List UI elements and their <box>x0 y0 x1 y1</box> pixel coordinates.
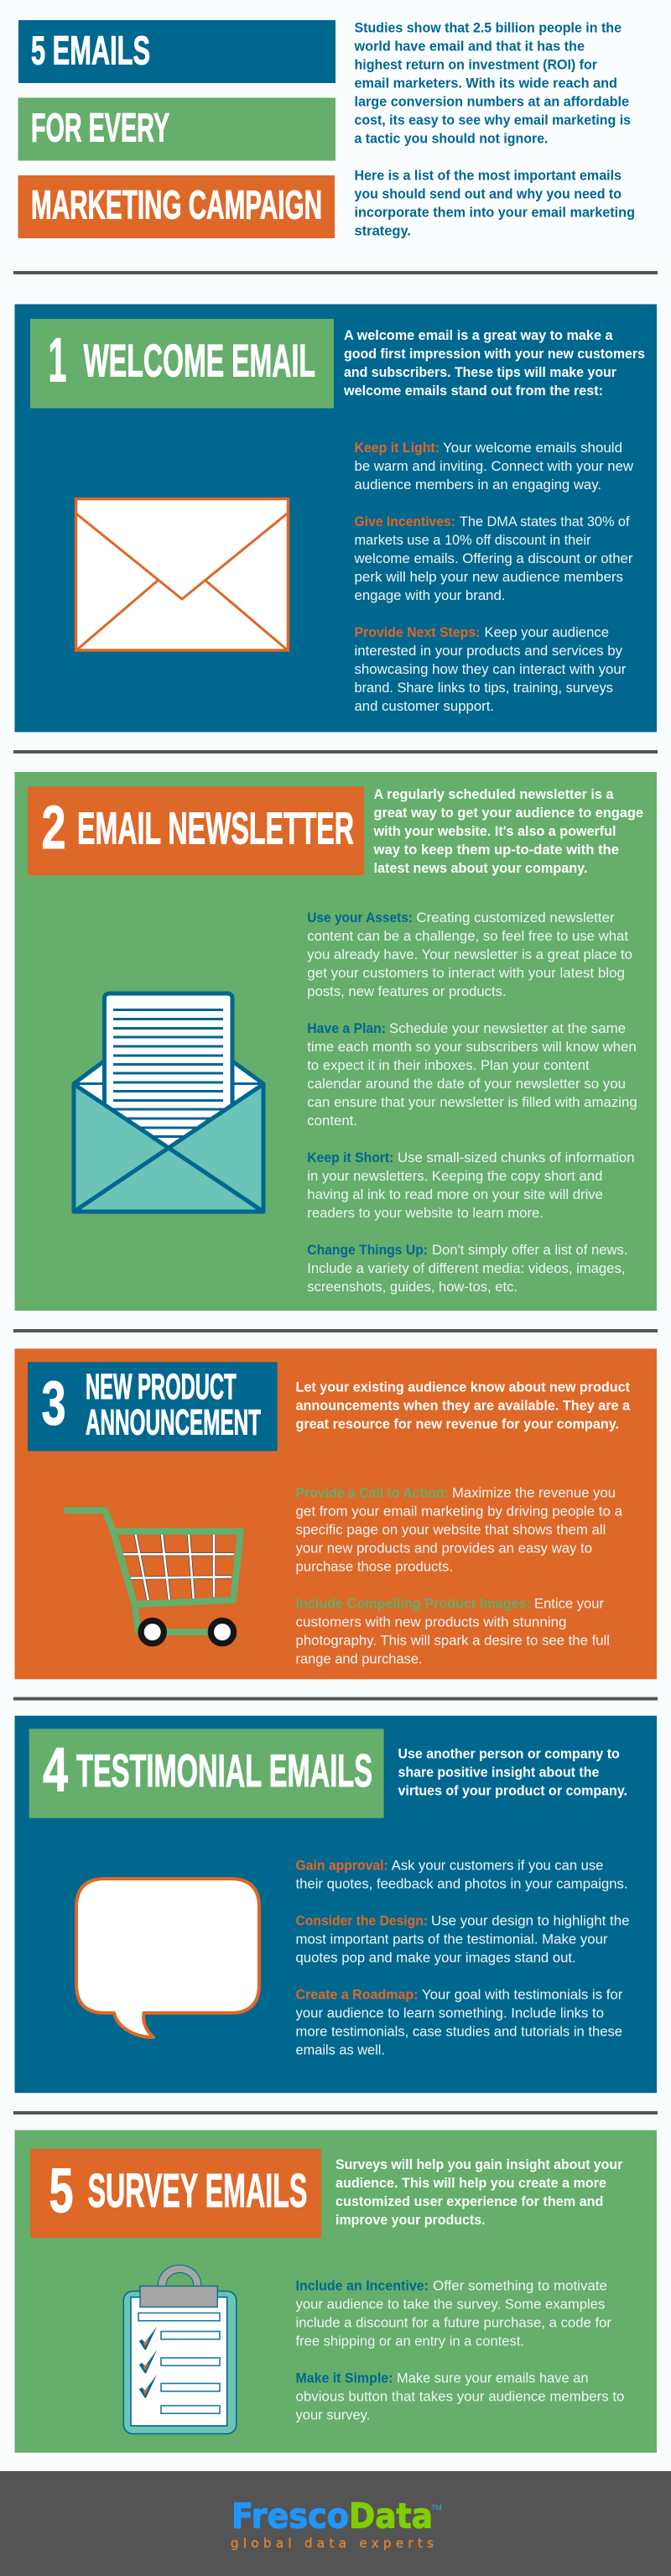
intro text: great resource for new revenue for your company. <box>295 1417 619 1432</box>
tip: have a plan: can ensure that your newsletter is filled with amazing <box>307 1094 637 1110</box>
intro text: virtues of your product or company. <box>398 1784 627 1799</box>
tip: include compelling product images <box>295 1596 610 1667</box>
tip: make it simple: your survey. <box>295 2407 370 2422</box>
heading: 5 survey emails <box>30 2149 321 2238</box>
tip: use your assets: Creating customized newsletter <box>416 910 615 926</box>
icon: envelope <box>75 498 289 650</box>
intro text: way to keep them up-to-date with the <box>372 842 619 858</box>
tip: include compelling product images: Include Compelling Product Images: <box>295 1596 531 1612</box>
tip: keep it short: in your newsletters. Keeping the copy short and <box>307 1168 602 1184</box>
intro text: share positive insight about the <box>398 1765 599 1781</box>
title bar: 5 emails <box>18 20 336 83</box>
intro text: customized user experience for them and <box>336 2194 603 2209</box>
tip: change things up <box>307 1242 627 1295</box>
tip: consider the design: most important parts of the testimonial. Make your <box>295 1932 608 1948</box>
intro paragraphs: world have email and that it has the <box>354 39 585 54</box>
tip: keep it short <box>307 1150 635 1221</box>
tip: provide a call to action: specific page on your website that shows them all <box>295 1522 606 1538</box>
intro text: Surveys will help you gain insight about your <box>336 2157 623 2172</box>
tip: provide next steps: Provide Next Steps: <box>354 624 480 640</box>
heading: 3 new product announcement: ANNOUNCEMENT <box>86 1403 261 1443</box>
tip: have a plan: time each month so your subscribers will know when <box>307 1039 637 1055</box>
tip: consider the design: Consider the Design: <box>295 1913 428 1929</box>
tip: use your assets: you already have. Your newsletter is a great place to <box>307 946 632 962</box>
intro text: Let your existing audience know about new product <box>295 1380 630 1395</box>
icon: shopping cart <box>67 1510 241 1646</box>
tip: provide a call to action: purchase those products. <box>295 1559 453 1575</box>
intro paragraphs: a tactic you should not ignore. <box>354 131 549 146</box>
icon: open envelope with newsletter <box>74 993 263 1212</box>
title bar: marketing campaign: MARKETING CAMPAIGN <box>31 183 322 228</box>
tip: have a plan: to expect it in their inboxes. Plan your content <box>307 1057 590 1073</box>
tip: keep it light: Keep it Light: <box>354 440 440 456</box>
intro text: great way to get your audience to engage <box>374 806 643 821</box>
heading: 2 email newsletter: 2 <box>42 794 65 862</box>
intro paragraphs: you should send out and why you need to <box>354 186 622 201</box>
tip: give incentives: Give Incentives: <box>354 514 455 529</box>
tip: use your assets: get your customers to interact with your latest blog <box>307 965 625 981</box>
title bar: for every <box>18 97 336 161</box>
logo: FrescoData: global data experts <box>231 2536 434 2551</box>
icon: speech bubble <box>76 1879 259 2037</box>
intro paragraphs: large conversion numbers at an affordable <box>354 94 629 109</box>
tip: keep it light: be warm and inviting. Connect with your new <box>354 458 634 474</box>
tip: include an incentive: include a discount for a future purchase, a code for <box>295 2314 611 2330</box>
tip: keep it light <box>354 440 634 493</box>
tip: change things up: Don't simply offer a list of news. <box>432 1242 627 1258</box>
tip: create a roadmap: emails as well. <box>295 2042 385 2058</box>
tip: have a plan: Have a Plan: <box>307 1020 386 1036</box>
intro text: Use another person or company to <box>398 1747 620 1762</box>
heading: 4 testimonial emails: 4 <box>43 1735 68 1804</box>
logo: FrescoData: Fresco <box>231 2495 349 2536</box>
footer <box>0 2471 671 2576</box>
tip: include an incentive: Include an Incentive: <box>295 2277 429 2293</box>
heading: 3 new product announcement: NEW PRODUCT <box>86 1367 237 1407</box>
title bar: marketing campaign <box>18 175 335 238</box>
tip: include compelling product images: range and purchase. <box>295 1651 423 1667</box>
tip: include an incentive: your audience to take the survey. Some examples <box>295 2296 605 2312</box>
tip: provide a call to action <box>295 1485 623 1575</box>
tip: provide a call to action: Maximize the revenue you <box>452 1485 616 1501</box>
tip: gain approval: their quotes, feedback and photos in your campaigns. <box>295 1876 627 1892</box>
panel: email newsletter <box>15 772 657 1311</box>
panel: welcome email <box>15 304 657 732</box>
tip: change things up: Change Things Up: <box>307 1242 428 1258</box>
tip: consider the design <box>295 1913 629 1966</box>
tip: keep it short: Use small-sized chunks of information <box>398 1150 635 1165</box>
intro text <box>372 787 643 876</box>
intro paragraphs: highest return on investment (ROI) for <box>354 57 598 72</box>
heading: 1 welcome email <box>30 319 334 408</box>
tip: gain approval: Gain approval: <box>295 1858 388 1874</box>
tip: change things up: screenshots, guides, how-tos, etc. <box>307 1279 518 1295</box>
intro paragraphs: email marketers. With its wide reach and <box>354 76 617 91</box>
tip: use your assets <box>307 910 632 999</box>
intro paragraphs: incorporate them into your email marketing <box>354 205 635 220</box>
tip: make it simple: obvious button that takes your audience members to <box>295 2388 624 2404</box>
tip: provide next steps: brand. Share links to tips, training, surveys <box>354 680 613 696</box>
title bar: 5 emails: 5 EMAILS <box>31 29 150 74</box>
panel: testimonial emails <box>15 1716 657 2093</box>
tip: provide next steps: interested in your products and services by <box>354 643 622 659</box>
tip: create a roadmap: your audience to learn something. Include links to <box>295 2005 604 2021</box>
intro text: welcome emails stand out from the rest: <box>343 383 603 399</box>
tip: consider the design: quotes pop and make your images stand out. <box>295 1950 576 1966</box>
heading: 5 survey emails: 5 <box>49 2155 74 2225</box>
heading: 3 new product announcement: 3 <box>42 1368 65 1438</box>
panel: new product announcement <box>15 1348 657 1679</box>
intro paragraphs <box>354 20 635 238</box>
tip: create a roadmap <box>295 1987 623 2058</box>
tip: create a roadmap: Create a Roadmap: <box>295 1987 418 2003</box>
tip: create a roadmap: more testimonials, case studies and tutorials in these <box>295 2024 622 2040</box>
tip: include compelling product images: photography. This will spark a desire to see the full <box>295 1633 610 1649</box>
tip: consider the design: Use your design to highlight the <box>431 1913 629 1929</box>
tip: give incentives: markets use a 10% off discount in their <box>354 532 591 548</box>
intro text: latest news about your company. <box>374 861 587 876</box>
heading: 2 email newsletter <box>28 787 364 875</box>
intro paragraphs: Here is a list of the most important emails <box>354 168 622 183</box>
tip: create a roadmap: Your goal with testimonials is for <box>422 1987 623 2003</box>
intro text <box>336 2157 623 2228</box>
intro text <box>398 1747 627 1799</box>
tip: use your assets: posts, new features or products. <box>307 983 507 999</box>
tip: use your assets: Use your Assets: <box>307 910 413 926</box>
tip: keep it short: having al ink to read more on your site will drive <box>307 1186 603 1202</box>
logo: FrescoData <box>231 2495 442 2551</box>
tip: keep it short: readers to your website to learn more. <box>307 1205 544 1221</box>
intro text <box>295 1380 631 1432</box>
tip: use your assets: content can be a challenge, so feel free to use what <box>307 928 628 944</box>
tip: change things up: Include a variety of different media: videos, images, <box>307 1260 625 1276</box>
tip: provide next steps: showcasing how they can interact with your <box>354 661 627 677</box>
tip: make it simple: Make sure your emails have an <box>397 2370 589 2386</box>
tip: give incentives: engage with your brand. <box>354 587 505 603</box>
tip: include an incentive <box>295 2277 611 2349</box>
intro text: A welcome email is a great way to make a <box>344 328 613 343</box>
intro paragraphs: Studies show that 2.5 billion people in the <box>354 20 622 35</box>
tip: gain approval <box>295 1858 627 1892</box>
intro text: with your website. It's also a powerful <box>373 824 616 839</box>
tip: provide a call to action: your new products and provides an easy way to <box>295 1541 592 1557</box>
intro text: good first impression with your new customers <box>344 347 645 362</box>
heading: 4 testimonial emails: TESTIMONIAL EMAILS <box>76 1744 372 1796</box>
intro text: and subscribers. These tips will make your <box>344 365 617 380</box>
tip: include compelling product images: Entice your <box>534 1596 604 1612</box>
tip: provide a call to action: Provide a Call to Action: <box>295 1485 449 1501</box>
tip: have a plan: calendar around the date of your newsletter so you <box>307 1076 626 1092</box>
intro text: announcements when they are available. They are a <box>295 1399 631 1414</box>
logo: FrescoData: Data <box>349 2495 433 2536</box>
tip: gain approval: Ask your customers if you can use <box>392 1858 603 1874</box>
tip: provide next steps: Keep your audience <box>485 624 609 640</box>
heading: 4 testimonial emails <box>29 1729 384 1818</box>
heading: 3 new product announcement <box>28 1362 278 1451</box>
header: title bars <box>18 20 336 238</box>
heading: 1 welcome email: WELCOME EMAIL <box>84 334 315 386</box>
tip: provide a call to action: get from your email marketing by driving people to a <box>295 1504 623 1520</box>
tip: give incentives: perk will help your new audience members <box>354 569 623 585</box>
tip: give incentives: The DMA states that 30% of <box>460 514 630 529</box>
tip: give incentives <box>354 514 633 603</box>
tip: provide next steps <box>354 624 627 714</box>
tip: keep it light: Your welcome emails should <box>443 440 622 456</box>
intro text: audience. This will help you create a more <box>336 2176 606 2191</box>
tip: include an incentive: free shipping or an entry in a contest. <box>295 2333 524 2349</box>
tip: keep it light: audience members in an engaging way. <box>354 477 601 493</box>
heading: 1 welcome email: 1 <box>49 326 67 394</box>
tip: have a plan: content. <box>307 1113 357 1129</box>
intro paragraphs: cost, its easy to see why email marketing is <box>354 112 631 128</box>
tip: include an incentive: Offer something to motivate <box>433 2277 607 2293</box>
panel: survey emails <box>15 2130 657 2453</box>
tip: make it simple: Make it Simple: <box>295 2370 393 2386</box>
logo: FrescoData: TM <box>431 2504 442 2512</box>
intro text: A regularly scheduled newsletter is a <box>374 787 614 802</box>
intro text: improve your products. <box>336 2213 486 2228</box>
tip: provide next steps: and customer support. <box>354 698 494 714</box>
tip: have a plan <box>307 1020 637 1129</box>
title bar: for every: FOR EVERY <box>31 106 169 151</box>
icon: clipboard checklist <box>123 2266 237 2433</box>
tip: include compelling product images: customers with new products with stunning <box>295 1614 567 1630</box>
tip: keep it short: Keep it Short: <box>307 1150 393 1165</box>
tip: give incentives: welcome emails. Offering a discount or other <box>354 550 633 566</box>
heading: 5 survey emails: SURVEY EMAILS <box>88 2164 307 2218</box>
tip: have a plan: Schedule your newsletter at the same <box>389 1020 626 1036</box>
heading: 2 email newsletter: EMAIL NEWSLETTER <box>77 804 354 854</box>
tip: make it simple <box>295 2370 624 2422</box>
intro text <box>343 328 645 399</box>
intro paragraphs: strategy. <box>354 223 411 238</box>
